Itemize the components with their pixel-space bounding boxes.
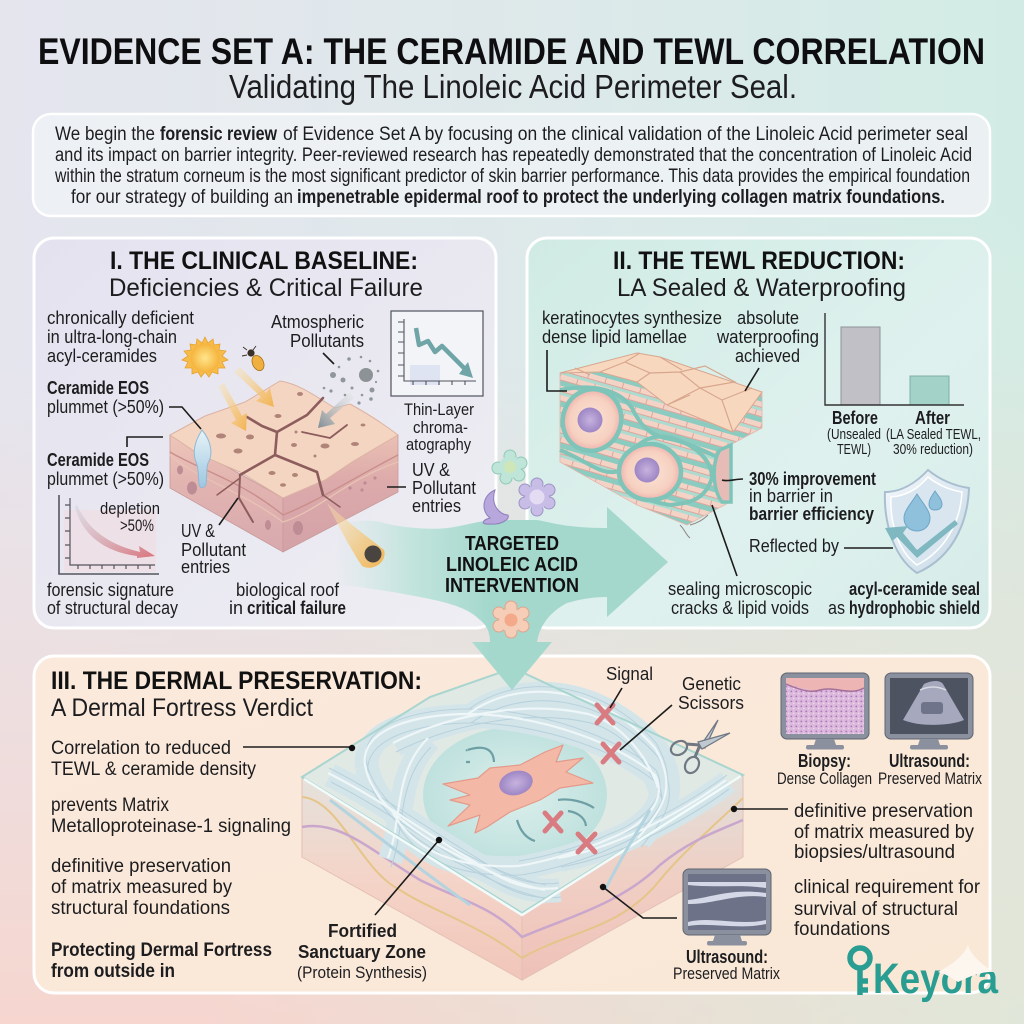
text: keratinocytes: keratinocytes synthesize (542, 307, 722, 328)
text: forensic signature: forensic signature (47, 579, 174, 600)
text: ceramide EOS lower: Ceramide EOS (47, 449, 149, 470)
arrow: UV rays (218, 367, 274, 431)
icon: shield (885, 470, 969, 573)
text: UV and pollutant right: UV & (412, 459, 451, 480)
monitor: ultrasound bottom (683, 869, 771, 946)
label: ultrasound top (878, 750, 983, 788)
text: biological roof: biological roof (236, 579, 340, 600)
chart label (100, 500, 160, 535)
panel heading II (613, 247, 906, 302)
intro line 4 (71, 187, 945, 208)
text: acyl-ceramide seal: as (828, 597, 845, 618)
text: atmospheric pollutants: Atmospheric (271, 311, 364, 332)
icon: meteor particle (327, 503, 385, 568)
text: protecting dermal fortress: Protecting Dermal Fortress (51, 939, 272, 961)
arrow: targeted intervention flow (335, 507, 668, 690)
intro line 1: forensic review (160, 124, 277, 145)
bar label before: TEWL) (837, 442, 871, 458)
text: absolute waterproofing: achieved (735, 345, 800, 366)
leader lines panel I (127, 407, 406, 525)
text: ceramide EOS upper: Ceramide EOS (47, 377, 149, 398)
label: biopsy: Biopsy: (798, 750, 851, 771)
text: definitive preservation right (794, 800, 974, 863)
bar label after: 30% reduction) (893, 442, 973, 458)
label: fortified sanctuary zone: Sanctuary Zone (298, 941, 426, 962)
text: biological roof: critical failure (247, 597, 346, 618)
text: sealing microscopic: sealing microscopic (668, 578, 812, 599)
panel: dermal preservation (34, 656, 999, 1003)
arrow label (445, 533, 579, 597)
logo (850, 945, 999, 1003)
text: UV and pollutant right (412, 459, 476, 516)
leader lines panel III (243, 688, 788, 918)
text: chronically deficient (47, 307, 194, 366)
text: definitive preservation left: of matrix measured by (51, 876, 232, 898)
chart: thin-layer chromatography (391, 311, 483, 396)
illustration: collagen block (302, 668, 743, 980)
text: 30 percent improvement: in barrier in (749, 485, 833, 506)
chart label: depletion (100, 500, 160, 518)
intro line 1: of Evidence Set A by focusing on the clinical validation of the Linoleic Acid perimeter seal (283, 124, 968, 145)
text: protecting dermal fortress: from outside in (51, 960, 175, 982)
text: UV and pollutant lower (181, 520, 246, 577)
text: keratinocytes: dense lipid lamellae (542, 326, 687, 347)
panel heading II: II. THE TEWL REDUCTION: (613, 247, 905, 275)
bar label after (886, 407, 981, 458)
text: prevents MMP: prevents Matrix (51, 794, 169, 816)
panel: clinical baseline (34, 238, 496, 628)
text: UV and pollutant right: entries (412, 495, 461, 516)
text: acyl-ceramide seal: acyl-ceramide seal (849, 578, 980, 599)
text: biological roof (229, 579, 346, 618)
text: definitive preservation left: definitive preservation (51, 855, 231, 877)
logo: Keyora (873, 955, 999, 1003)
label: fortified sanctuary zone: Fortified (328, 920, 397, 941)
label: genetic scissors: Scissors (678, 692, 744, 713)
arrow label: INTERVENTION (445, 575, 579, 597)
text: prevents MMP (51, 794, 291, 837)
icon: pollutant particles (323, 356, 379, 405)
text: clinical requirement (794, 876, 980, 940)
text: clinical requirement: clinical requirement for (794, 876, 980, 898)
text: thin-layer chromatography (404, 401, 474, 454)
panel: TEWL reduction (527, 238, 990, 628)
text: reflected by: Reflected by (749, 535, 840, 556)
text: ceramide EOS lower: plummet (>50%) (47, 468, 164, 489)
text: 30 percent improvement (749, 468, 876, 524)
text: forensic signature: of structural decay (47, 597, 179, 618)
label: fortified sanctuary zone (297, 920, 427, 982)
text: correlation (51, 737, 256, 780)
text: sealing microscopic: cracks & lipid voids (671, 597, 809, 618)
text: definitive preservation right: definitive preservation (794, 800, 973, 822)
text: definitive preservation right: of matrix measured by (794, 821, 974, 843)
fibroblast cell (443, 745, 593, 833)
illustration: lipid lamellae block (554, 353, 762, 538)
panel heading I (109, 247, 423, 302)
text: correlation: TEWL & ceramide density (51, 758, 256, 780)
text: thin-layer chromatography: Thin-Layer (404, 401, 474, 419)
chart label: >50% (120, 517, 154, 535)
label: fortified sanctuary zone: (Protein Synthesis) (297, 964, 427, 982)
bar label after: (LA Sealed TEWL, (886, 427, 981, 443)
text: protecting dermal fortress (51, 939, 272, 982)
label: signal: Signal (606, 663, 653, 684)
text: absolute waterproofing: absolute (737, 307, 799, 328)
monitor: ultrasound (885, 673, 973, 750)
text: chronically deficient: chronically deficient (47, 307, 194, 328)
intro line 1: We begin the (55, 124, 155, 145)
text: UV and pollutant lower: entries (181, 556, 230, 577)
text: thin-layer chromatography: atography (406, 436, 472, 454)
label: genetic scissors: Genetic (682, 673, 741, 694)
text: ceramide EOS lower (47, 449, 164, 489)
subtitle: Validating The Linoleic Acid Perimeter Seal. (229, 68, 797, 105)
leader lines panel II (547, 350, 759, 576)
text: ceramide EOS upper (47, 377, 164, 417)
text: 30 percent improvement: barrier efficiency (749, 503, 875, 524)
text: UV and pollutant lower: Pollutant (181, 539, 246, 560)
signaling arrows (466, 748, 594, 841)
blocked signal marks (545, 705, 619, 852)
text: definitive preservation left (51, 855, 232, 919)
text: acyl-ceramide seal (828, 578, 980, 618)
bar label before (827, 407, 881, 458)
label: biopsy (777, 750, 872, 788)
text: ceramide EOS upper: plummet (>50%) (47, 396, 164, 417)
bar label before: (Unsealed (827, 427, 881, 443)
icon: insect (242, 346, 266, 373)
label: biopsy: Dense Collagen (777, 770, 872, 788)
panel heading I: I. THE CLINICAL BASELINE: (110, 247, 418, 275)
intro line 4: impenetrable epidermal roof to protect the underlying collagen matrix foundations. (297, 187, 945, 208)
arrow: pollutant entry (318, 392, 354, 428)
label: ultrasound top: Preserved Matrix (878, 770, 983, 788)
text: chronically deficient: in ultra-long-chain (47, 326, 177, 347)
panel heading III (51, 667, 422, 722)
label: ultrasound bottom (673, 946, 781, 983)
panel heading III: III. THE DERMAL PRESERVATION: (51, 667, 422, 695)
intro line 4: for our strategy of building an (71, 187, 293, 208)
cell 1 (554, 381, 630, 459)
label: genetic scissors (678, 673, 744, 713)
text: correlation: Correlation to reduced (51, 737, 231, 759)
text: clinical requirement: foundations (794, 918, 890, 940)
icon: scissors (668, 720, 730, 776)
text: absolute waterproofing: waterproofing (716, 326, 819, 347)
label: ultrasound bottom: Preserved Matrix (673, 965, 781, 983)
text: atmospheric pollutants (271, 311, 364, 364)
illustration: cracked skin block (170, 381, 398, 552)
text: UV and pollutant lower: UV & (181, 520, 216, 541)
cell 2 (619, 444, 681, 500)
icons: floating molecules (483, 450, 555, 638)
text: definitive preservation left: structural foundations (51, 897, 230, 919)
chart: TEWL bar chart (825, 313, 981, 458)
bar label after: After (915, 407, 950, 428)
text: biological roof: in (229, 597, 243, 618)
panel heading II: LA Sealed & Waterproofing (617, 274, 906, 302)
text: clinical requirement: survival of structural (794, 898, 958, 920)
bar label before: Before (832, 407, 878, 428)
monitor: biopsy (781, 673, 869, 750)
text: UV and pollutant right: Pollutant (412, 477, 476, 498)
icon: sun (182, 337, 228, 377)
text: prevents MMP: Metalloproteinase-1 signaling (51, 815, 291, 837)
text: 30 percent improvement: 30% improvement (749, 468, 876, 489)
panel: intro summary (33, 114, 990, 216)
text: thin-layer chromatography: chroma- (413, 419, 468, 437)
text: chronically deficient: acyl-ceramides (47, 345, 157, 366)
panel heading I: Deficiencies & Critical Failure (109, 274, 423, 302)
text: forensic signature (47, 579, 179, 618)
panel heading III: A Dermal Fortress Verdict (51, 694, 313, 722)
arrow label: LINOLEIC ACID (446, 554, 578, 576)
icon: water droplet (194, 430, 211, 488)
chart: depletion curve (59, 495, 160, 574)
arrow label: TARGETED (465, 533, 559, 555)
text: sealing microscopic (668, 578, 812, 618)
text: acyl-ceramide seal: hydrophobic shield (849, 597, 980, 618)
label: ultrasound bottom: Ultrasound: (686, 946, 768, 967)
text: definitive preservation right: biopsies/ultrasound (794, 841, 955, 863)
text: keratinocytes (542, 307, 722, 347)
label: ultrasound top: Ultrasound: (889, 750, 970, 771)
text: atmospheric pollutants: Pollutants (290, 330, 364, 351)
text: absolute waterproofing (716, 307, 819, 366)
